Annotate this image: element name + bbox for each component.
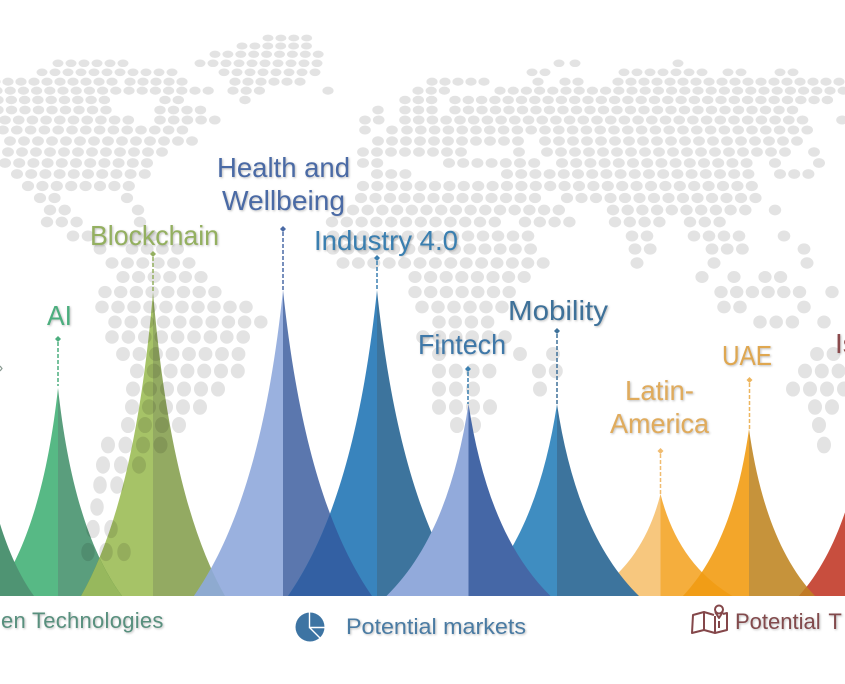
clipped label fragment at left edge — [0, 366, 2, 371]
label: Blockchain: Blockchain — [90, 220, 219, 251]
connector: AI — [55, 336, 61, 386]
overlap: UAE and Israel — [799, 586, 815, 596]
label: Latin-America: Latin- — [625, 375, 694, 406]
connector: Mobility — [554, 328, 560, 404]
icon: folded map with pin — [692, 606, 727, 633]
connector: Latin-America — [658, 448, 664, 494]
connector: Blockchain — [150, 251, 156, 292]
overlap: Blockchain and Health — [194, 568, 225, 596]
legend: Green Technologies: en Technologies — [1, 608, 164, 633]
label: Fintech: Fintech — [418, 329, 506, 360]
label: AI: AI — [47, 300, 72, 331]
peak: Mobility — [475, 404, 639, 596]
label: UAE: UAE — [722, 340, 772, 371]
connector: Fintech — [465, 366, 471, 404]
connector: Industry 4.0 — [374, 255, 380, 290]
peak: Health and Wellbeing — [194, 290, 372, 596]
label: Mobility: Mobility — [508, 295, 608, 326]
peak: Fintech — [386, 404, 550, 596]
overlap: Health and Industry — [288, 514, 372, 596]
connector: UAE — [746, 377, 752, 429]
connector: Health and Wellbeing — [280, 226, 286, 290]
overlap: AI and Blockchain — [81, 558, 122, 596]
peak: Latin-America — [588, 494, 732, 596]
overlap: Latin-America and UAE — [683, 572, 732, 596]
dotted world map — [0, 38, 845, 552]
label: Latin-America — [610, 375, 709, 439]
peak: Industry 4.0 — [288, 290, 466, 596]
label: Latin-America: America — [610, 408, 709, 439]
peak: Green left partial — [0, 409, 34, 596]
peak: Israel — [799, 413, 845, 596]
peak: AI — [0, 388, 122, 596]
icon: pie chart — [296, 612, 325, 642]
peak: Blockchain — [81, 292, 225, 596]
legend: Potential Targets: Potential T — [735, 609, 842, 634]
label: Health and Wellbeing — [217, 152, 350, 216]
label: Health and Wellbeing: Health and — [217, 152, 350, 183]
label: Industry 4.0: Industry 4.0 — [314, 225, 458, 256]
peak: UAE — [683, 429, 815, 596]
legend: Potential markets: Potential markets — [346, 614, 526, 639]
label: Health and Wellbeing: Wellbeing — [222, 185, 345, 216]
